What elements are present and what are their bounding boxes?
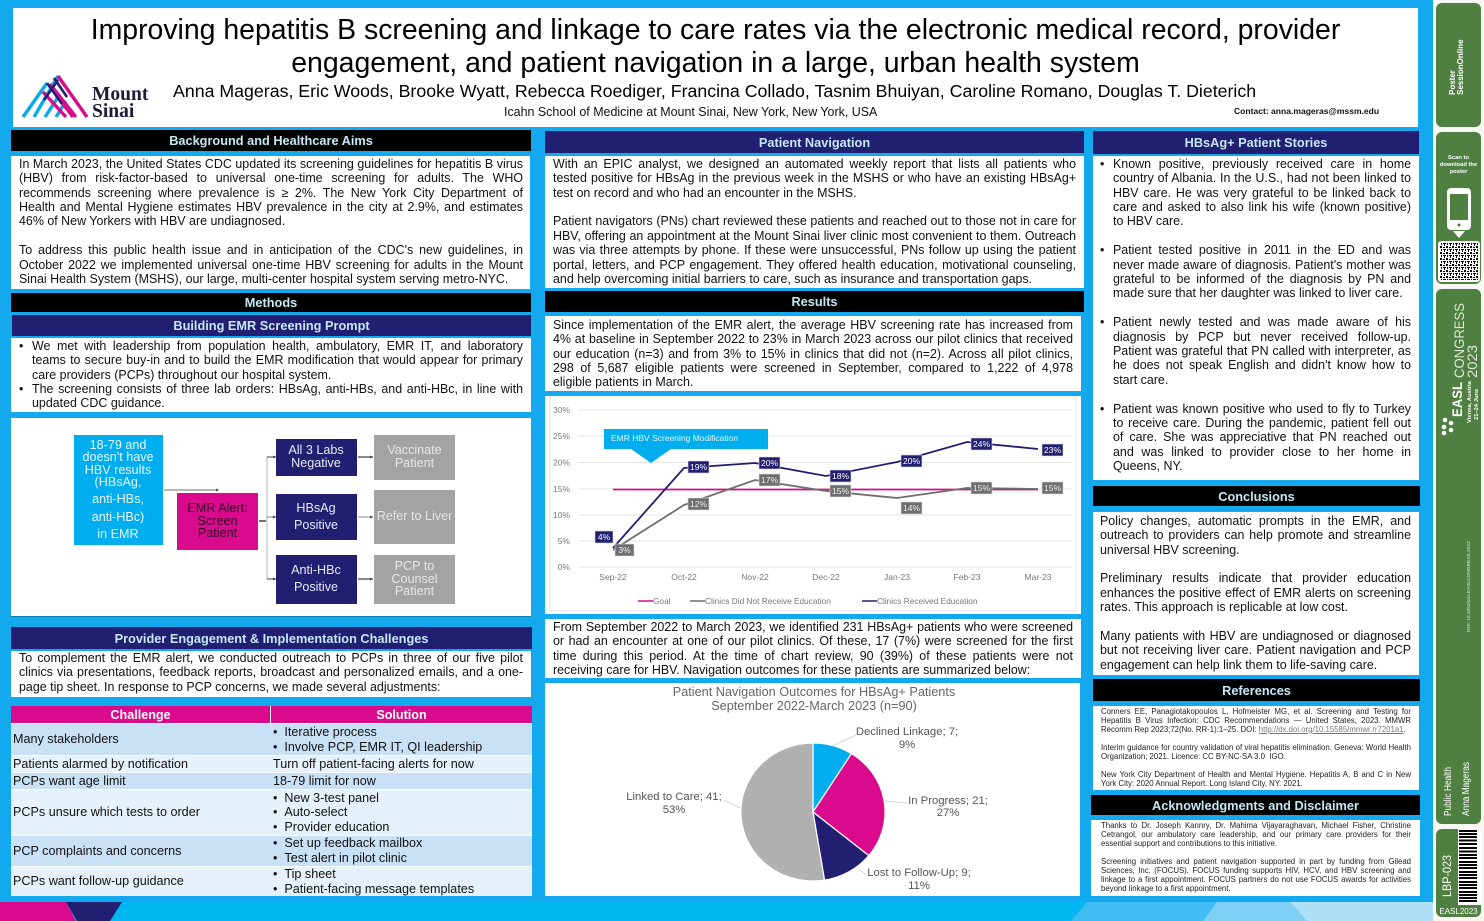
data labels: no education: 15% — [1044, 483, 1061, 493]
box: anti-HBc positive: Anti-HBc — [291, 563, 341, 577]
authors: Anna Mageras, Eric Woods, Brooke Wyatt, Rebecca Roediger, Francina Collado, Tasnim Bhuiyan, Caroline Romano, Douglas T. Dieterich — [173, 81, 1256, 101]
box: EMR alert: EMR Alert: — [187, 501, 248, 515]
box: anti-HBc positive — [276, 555, 357, 604]
box: eligibility — [74, 435, 163, 545]
legend: Goal — [653, 596, 671, 606]
text block: bullets: care and asked to also link his wife (known positive) — [1113, 200, 1411, 214]
text block: bullets: We met with leadership from population health, ambulatory, EMR IT, and laboratory — [32, 339, 523, 353]
heading — [545, 131, 1084, 153]
text block: (HBV) from risk-factor-based to universal one-time screening for adults. The WHO — [19, 171, 523, 185]
box: refer to liver — [374, 490, 455, 544]
x axis labels: Mar-23 — [1025, 572, 1052, 582]
box: HBsAg positive — [276, 494, 357, 540]
data labels: received education: 20% — [903, 456, 920, 466]
series: clinics did not receive education — [613, 480, 1038, 550]
legend — [638, 596, 978, 606]
data labels: received education: 19% — [690, 462, 707, 472]
table row — [11, 756, 532, 772]
box: HBsAg positive: Positive — [294, 518, 338, 532]
sidebar: download QR: download the — [1440, 162, 1478, 168]
text block: but not receiving liver care. Patient navigation and PCP — [1100, 643, 1411, 657]
table row: PCPs want age limit — [13, 774, 126, 788]
contact: Contact: anna.mageras@mssm.edu — [1234, 106, 1379, 116]
text block: Thanks to Dr. Joseph Kannry, Dr. Mahima Vijayaraghavan, Michael Fisher, Christine — [1101, 820, 1411, 830]
y axis labels: 5% — [558, 536, 570, 546]
data labels: no education — [615, 474, 1063, 556]
text block: bullets: Patient was known positive who used to fly to Turkey — [1113, 402, 1411, 416]
title — [91, 14, 1340, 79]
text block: To address this public health issue and in anticipation of the CDC's new guidelines, in — [19, 243, 523, 257]
panel: provider engagement — [11, 627, 532, 697]
box: eligibility: (HBsAg, — [95, 475, 141, 489]
text block: engagement can help link them to life-saving care. — [1100, 658, 1377, 672]
box: PCP to counsel patient: PCP to — [395, 559, 434, 573]
text block: bullets: The screening consists of three lab orders: HBsAg, anti-HBs, and anti-HBc, in line with — [32, 382, 523, 396]
box: eligibility: in EMR — [97, 527, 139, 541]
text block: Patient navigators (PNs) chart reviewed these patients and reached out to those not in care for — [553, 214, 1076, 228]
slice labels: Lost to Follow-Up; 9; — [867, 867, 971, 879]
table row: Turn off patient-facing alerts for now — [273, 757, 474, 771]
text block: Sciences, Inc. (FOCUS). FOCUS funding supports HIV, HCV, and HBV screening and — [1101, 866, 1411, 875]
box: vaccinate patient — [374, 435, 455, 480]
box: anti-HBc positive: Positive — [294, 580, 338, 594]
box: all 3 labs negative: All 3 Labs — [288, 443, 344, 457]
text block: was via three attempts by phone. If these were unsuccessful, PNs follow up using the patient — [553, 243, 1076, 257]
heading: Results — [791, 294, 838, 309]
table row: • Auto-select — [273, 805, 347, 819]
data labels: received education: 4% — [598, 532, 611, 542]
table row — [11, 724, 532, 755]
table: challenges and solutions — [11, 706, 532, 896]
text block: bullets — [1093, 156, 1419, 480]
x axis labels: Oct-22 — [671, 572, 697, 582]
text block: bullets: country of Albania. In the U.S., had not been linked to — [1113, 171, 1411, 185]
table header — [11, 706, 532, 723]
text block: 4% at baseline in September 2022 to 23% in March 2023 across our pilot clinics that received — [553, 332, 1073, 346]
slice labels — [626, 726, 988, 892]
box: eligibility: anti-HBc) — [92, 510, 144, 524]
heading: Provider Engagement & Implementation Challenges — [115, 630, 428, 646]
sidebar: poster ID and barcode: LBP-023 — [1440, 855, 1454, 897]
text block: or had an encounter at one of our pilot clinics. Of these, 17 (7%) were screened for the first — [553, 634, 1073, 648]
y axis labels: 0% — [558, 562, 570, 572]
text block — [1093, 512, 1419, 675]
slice labels: 27% — [937, 807, 959, 819]
text block: universal HBV screening. — [1100, 543, 1240, 557]
table row: • Tip sheet — [273, 867, 336, 881]
text block: bullets: updated CDC guidance. — [32, 396, 165, 410]
series: goal — [613, 488, 1038, 490]
data labels: no education: 3% — [618, 545, 631, 555]
text block: receiving care for HBV. Navigation outcomes for these patients are summarized below: — [553, 663, 1030, 677]
panel: references — [1093, 679, 1420, 790]
text block: enhances the positive effect of EMR alerts on screening — [1100, 586, 1411, 600]
text block: Recomm Rep 2023;72(No. RR-1):1–25. DOI: http://dx.doi.org/10.15585/mmwr.rr7201a1. — [1101, 725, 1406, 734]
text block: October 2022 we implemented universal one-time HBV screening for adults in the Mount — [19, 258, 523, 272]
heading — [11, 293, 531, 312]
text block — [545, 619, 1081, 678]
table row: • Involve PCP, EMR IT, QI leadership — [273, 740, 482, 754]
text block: bullets: Queens, NY. — [1113, 459, 1183, 473]
slice labels: Declined Linkage; 7; — [856, 726, 958, 738]
text block: 298 of 5,687 eligible patients were screened in September, compared to 1,222 of 4,978 — [553, 361, 1073, 375]
box: HBsAg positive: HBsAg — [296, 501, 336, 515]
text block: portal, letters, and PCP engagement. They offered health education, motivational counseling, — [553, 258, 1076, 272]
text block: Sinai Health System (MSHS), our large, multi-center hospital system serving metro-NYC. — [19, 272, 508, 286]
text block: bullets: and was linked to provider close to her home in — [1113, 445, 1411, 459]
x axis labels: Sep-22 — [599, 572, 627, 582]
panel: methods — [11, 293, 531, 617]
leader lines — [724, 735, 908, 875]
slice labels: 53% — [663, 804, 685, 816]
line chart — [545, 396, 1081, 614]
text block: bullets: Patient was grateful that PN called with interpreter, as — [1113, 344, 1411, 358]
box: PCP to counsel patient: Counsel — [391, 572, 438, 586]
sidebar: EASL Congress 2023: EASL — [1449, 382, 1465, 417]
y axis labels: 15% — [553, 484, 570, 494]
panel: background and healthcare aims — [11, 130, 531, 289]
sidebar: poster session online: Poster — [1448, 70, 1457, 95]
heading: Patient Navigation — [759, 134, 870, 150]
text block: and help overcoming initial barriers to care, such as insurance and transportation gaps. — [553, 272, 1032, 286]
text block: In March 2023, the United States CDC updated its screening guidelines for hepatitis B virus — [19, 157, 523, 171]
y axis labels: 20% — [553, 458, 570, 468]
text block — [545, 156, 1084, 288]
table row: • New 3-test panel — [273, 791, 379, 805]
slice labels: 9% — [899, 739, 915, 751]
box: EMR alert: Screen — [198, 514, 237, 528]
table row: • Provider education — [273, 820, 389, 834]
text block: bullets: diagnosis by PCP but never received follow-up. — [1113, 330, 1411, 344]
text block: Interim guidance for country validation of viral hepatitis elimination. Geneva: World Health — [1101, 743, 1411, 752]
text block — [11, 651, 531, 697]
heading — [1093, 131, 1419, 154]
legend: Clinics Received Education — [877, 596, 978, 606]
slice labels: Linked to Care; 41; — [626, 791, 722, 803]
text block: bullets: to receive care. During the pandemic, patient fell out — [1113, 416, 1411, 430]
sidebar: EASL Congress 2023: CONGRESS — [1451, 303, 1467, 378]
legend: Clinics Did Not Receive Education — [705, 596, 831, 606]
y axis labels: 10% — [553, 510, 570, 520]
sidebar: poster session online — [1436, 3, 1481, 127]
text block: Policy changes, automatic prompts in the EMR, and — [1100, 514, 1411, 528]
text block — [1093, 706, 1419, 790]
panel: conclusions — [1093, 486, 1420, 675]
text block: Cetrangol, our ambulatory care leadership, and our primary care providers for their — [1101, 830, 1411, 839]
text block: bullets: of care. She was appreciative that PN reached out — [1113, 430, 1411, 444]
table row: 18-79 limit for now — [273, 774, 376, 788]
text block: bullets: Patient newly tested and was made aware of his — [1113, 315, 1411, 329]
panel: patient stories — [1093, 131, 1419, 480]
sidebar: congress panel — [1433, 0, 1484, 921]
text block: Health and Mental Hygiene estimates HBV prevalence in the city at 2.9%, and estimates — [19, 200, 523, 214]
flowchart — [11, 418, 531, 616]
sidebar: EASL Congress 2023: Anna Mageras — [1460, 762, 1472, 816]
panel: results — [545, 291, 1084, 896]
callout: EMR HBV screening modification: EMR HBV Screening Modification — [611, 433, 738, 443]
x axis labels: Dec-22 — [812, 572, 840, 582]
table row: Many stakeholders — [13, 732, 119, 746]
title banner — [13, 8, 1418, 127]
text block: essential support and contributions to this initiative. — [1101, 839, 1277, 848]
text block: Preliminary results indicate that provider education — [1100, 571, 1411, 585]
box: eligibility: 18-79 and — [90, 438, 146, 452]
box: vaccinate patient: Vaccinate — [387, 443, 442, 457]
box: eligibility: HBV results — [85, 463, 151, 477]
title: Improving hepatitis B screening and linkage to care rates via the electronic medical record, provider — [91, 14, 1340, 46]
heading — [545, 291, 1084, 312]
heading — [11, 627, 532, 649]
heading: HBsAg+ Patient Stories — [1185, 135, 1327, 150]
text block: bullets: he does not speak English and didn't know how to — [1113, 358, 1411, 372]
heading — [11, 130, 531, 151]
sidebar: download QR: poster — [1450, 169, 1468, 175]
box: eligibility: doesn't have — [82, 450, 154, 464]
table row — [11, 773, 532, 789]
y axis labels — [553, 405, 570, 572]
slice labels: 11% — [908, 880, 930, 892]
chart title: September 2022-March 2023 (n=90) — [711, 699, 917, 713]
text block: our education (n=3) and from 3% to 15% in clinics that did not (n=2). Across all pilot clinics, — [553, 347, 1073, 361]
table row: • Set up feedback mailbox — [273, 836, 422, 850]
text block: 46% of New Yorkers with HBV are undiagnosed. — [19, 214, 285, 228]
box: all 3 labs negative: Negative — [291, 456, 341, 470]
pie chart — [545, 683, 1080, 896]
sidebar: download QR: Scan to — [1448, 155, 1469, 161]
data labels: received education: 24% — [973, 439, 990, 449]
heading: Conclusions — [1218, 488, 1295, 504]
text block: bullets: care providers (PCPs) throughout our hospital system. — [32, 368, 331, 382]
panel: acknowledgments and disclaimer — [1091, 795, 1420, 896]
sidebar: EASL Congress 2023: 21–24 June — [1474, 388, 1480, 420]
data labels: received education — [595, 438, 1063, 543]
chart title: Patient Navigation Outcomes for HBsAg+ Patients — [673, 685, 955, 699]
text block: Since implementation of the EMR alert, the average HBV screening rate has increased from — [553, 318, 1073, 332]
title: engagement, and patient navigation in a large, urban health system — [291, 47, 1140, 79]
text block: clinics via presentations, feedback reports, broadcast and personalized emails, and a one- — [19, 665, 523, 679]
text block: HBV, offering an appointment at the Mount Sinai liver clinic most convenient to them. Outreach — [553, 229, 1076, 243]
y axis labels: 30% — [553, 405, 570, 415]
heading: Methods — [245, 295, 297, 310]
text block: To complement the EMR alert, we conducted outreach to PCPs in three of our five pilot — [19, 651, 523, 665]
text block: bullets: HBV care. He was very grateful to be linked back to — [1113, 186, 1411, 200]
text block: bullets: Patient tested positive in 2011 in the ED and was — [1113, 243, 1411, 257]
data labels: no education: 17% — [761, 475, 778, 485]
text block: test on record and who had an encounter in the MSHS. — [553, 186, 857, 200]
table row — [11, 867, 532, 896]
heading: References — [1222, 682, 1291, 698]
box: EMR alert: Patient — [198, 526, 238, 540]
pie slices — [741, 743, 885, 881]
text block: With an EPIC analyst, we designed an automated weekly report that lists all patients who — [553, 157, 1076, 171]
text block — [545, 316, 1081, 391]
heading — [1093, 486, 1420, 506]
box: PCP to counsel patient: Patient — [395, 584, 435, 598]
y axis labels: 25% — [553, 431, 570, 441]
heading — [1091, 795, 1420, 815]
data labels: received education: 18% — [832, 471, 849, 481]
table row — [11, 790, 532, 835]
text block: Conners EE, Panagiotakopoulos L, Hofmeister MG, et al. Screening and Testing for — [1101, 706, 1411, 716]
text block: time during this period. At the time of chart review, 90 (39%) of these patients were not — [553, 649, 1073, 663]
heading: Acknowledgments and Disclaimer — [1152, 798, 1359, 812]
text block: bullets: teams to secure buy-in and to build the EMR modification that would appear for primary — [32, 353, 523, 367]
text block: eligible patients in March. — [553, 375, 693, 389]
table row: PCPs unsure which tests to order — [13, 805, 200, 819]
data labels: received education: 20% — [761, 458, 778, 468]
text block: bullets: to HBV care. — [1113, 214, 1184, 228]
box: PCP to counsel patient — [374, 555, 455, 604]
text block: New York City Department of Health and Mental Hygiene. Hepatitis A, B and C in New — [1101, 770, 1411, 779]
text block: bullets — [11, 338, 531, 412]
text block: Screening initiatives and patient navigation supported in part by funding from Gilead — [1101, 857, 1411, 866]
x axis labels: Jan-23 — [884, 572, 910, 582]
text block: Organization; 2021. Licence: CC BY-NC-SA 3.0 IGO. — [1101, 752, 1286, 761]
table header: Challenge — [110, 708, 171, 722]
table header: Solution — [376, 708, 427, 722]
data labels: no education: 15% — [973, 483, 990, 493]
text block: York City: 2020 Annual Report. Long Island City, NY. 2021. — [1101, 779, 1303, 788]
logo: Mount Sinai: Mount — [92, 84, 149, 105]
subheading: Building EMR Screening Prompt — [173, 318, 370, 333]
data labels: no education: 15% — [832, 486, 849, 496]
text block: outreach to providers can help promote and streamline — [1100, 528, 1411, 542]
logo: Mount Sinai — [22, 75, 149, 120]
text block: bullets: grateful to be informed of the diagnosis by PN and — [1113, 272, 1411, 286]
data labels: received education: 23% — [1044, 445, 1061, 455]
data labels: no education: 14% — [903, 503, 920, 513]
text block: tested positive for HBsAg in the previous week in the MSHS or who have an existing HBsAg+ — [553, 171, 1076, 185]
slice labels: In Progress; 21; — [908, 795, 988, 807]
sidebar: poster session online: SessionOnline — [1456, 39, 1465, 95]
text block: bullets: start care. — [1113, 373, 1168, 387]
sidebar: EASL Congress 2023: 2023 — [1464, 345, 1480, 378]
text block: bullets: Known positive, previously received care in home — [1113, 157, 1411, 171]
text block: recommends screening where prevalence is ≥ 2%. The New York City Department of — [19, 186, 523, 200]
text block: From September 2022 to March 2023, we identified 231 HBsAg+ patients who were screened — [553, 620, 1073, 634]
series: clinics received education — [613, 442, 1038, 548]
callout: EMR HBV screening modification — [604, 429, 768, 463]
text block — [1091, 820, 1420, 896]
table row: • Test alert in pilot clinic — [273, 851, 407, 865]
text block: page tip sheet. In response to PCP concerns, we made several adjustments: — [19, 680, 440, 694]
box: all 3 labs negative — [276, 439, 357, 476]
sidebar: download QR — [1436, 132, 1481, 284]
sidebar: EASL Congress 2023 — [1436, 289, 1481, 824]
sidebar: EASL Congress 2023: DOI: 10.3252/pos.EASLCONGRESS.2023 — [1466, 541, 1472, 632]
heading: Background and Healthcare Aims — [169, 133, 373, 148]
box: eligibility: anti-HBs, — [92, 492, 144, 506]
x axis labels: Feb-23 — [954, 572, 981, 582]
table row: Patients alarmed by notification — [13, 757, 188, 771]
text block: linkage to a first appointment. FOCUS partners do not use FOCUS awards for activities — [1101, 875, 1411, 884]
text block: Many patients with HBV are undiagnosed or diagnosed — [1100, 629, 1411, 643]
box: EMR alert — [177, 493, 258, 550]
x axis labels — [599, 572, 1052, 582]
table row: • Patient-facing message templates — [273, 882, 474, 896]
sidebar: poster ID and barcode: EASL2023 — [1439, 907, 1478, 916]
table row: PCP complaints and concerns — [13, 844, 181, 858]
text block: Hepatitis B Virus Infection: CDC Recommendations — United States, 2023. MMWR — [1101, 716, 1411, 725]
box: vaccinate patient: Patient — [395, 456, 435, 470]
box: refer to liver: Refer to Liver — [377, 509, 452, 523]
affiliation: Icahn School of Medicine at Mount Sinai, New York, New York, USA — [504, 105, 877, 119]
table row: • Iterative process — [273, 725, 377, 739]
subheading — [12, 315, 531, 336]
x axis labels: Nov-22 — [741, 572, 769, 582]
text block: bullets: made sure that her daughter was linked to liver care. — [1113, 286, 1403, 300]
data labels: no education: 12% — [690, 499, 707, 509]
sidebar: EASL Congress 2023: Vienna, Austria — [1467, 380, 1473, 423]
text block: beyond linkage to a first appointment. — [1101, 884, 1231, 893]
text block — [11, 156, 530, 289]
table row: PCPs want follow-up guidance — [13, 874, 184, 888]
heading — [1093, 679, 1420, 701]
text block: rates. This approach is replicable at low cost. — [1100, 600, 1348, 614]
panel: patient navigation — [545, 131, 1084, 288]
sidebar: poster ID and barcode — [1436, 829, 1481, 917]
table row — [11, 836, 532, 866]
text block: bullets: never made aware of diagnosis. Patient's mother was — [1113, 258, 1411, 272]
chart title — [673, 685, 955, 713]
sidebar: EASL Congress 2023: Public Health — [1442, 767, 1454, 816]
